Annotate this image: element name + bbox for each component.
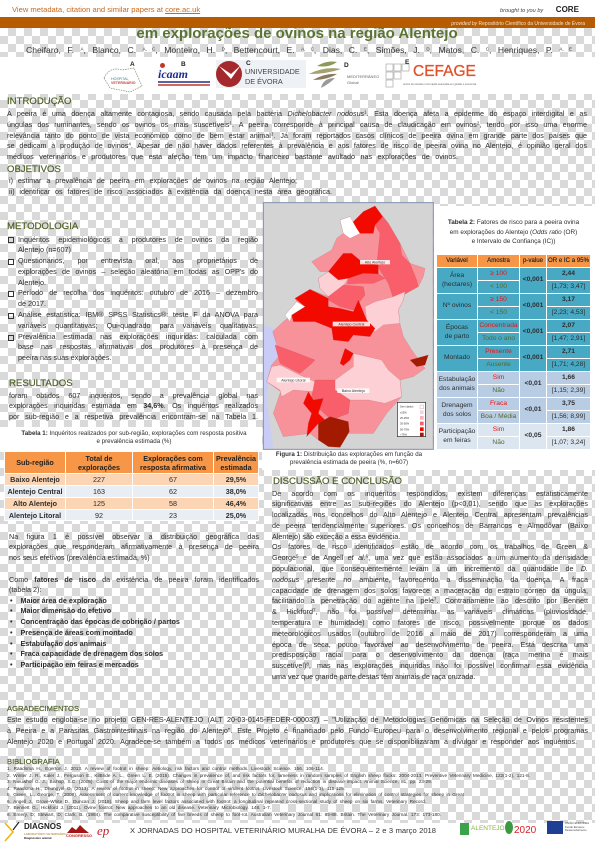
text: metodologia list: Período de recolha dos inquéritos: outubro de 2016 – dezembro [18,288,258,297]
logo B: icaam: icaam [158,67,188,81]
caption: tabela 2: Tabela 2: Fatores de risco para a peeira ovina [448,219,579,226]
footer logo: european union: Fundo Europeu [565,825,584,829]
text: discussao e conclusao: uma vez que grande parte destas têm animais de raça cruzada. [272,672,475,681]
table 2: fatores de risco: <0,05 [525,432,541,439]
text: metodologia list: Análise estatística: IBM® SPSS Statistics®: teste F da ANOVA para [18,310,258,319]
caption: tabela 2: em explorações do Alentejo (Odds ratio (OR) [450,229,577,236]
table 2: fatores de risco: Ausente [486,361,511,368]
text: resultados: explorações inquiridas estimada em 34,6%. Os inquéritos realizados [9,401,258,410]
table 2: fatores de risco: 3,17 [562,296,575,303]
table 2: fatores de risco: [1,73; 3,47] [552,283,585,290]
list: fatores de risco: • Concentração das épocas de cobrição / partos [10,617,180,626]
footer logo: portugal 2020 [505,821,536,836]
logo D: mediterranean institute [309,62,380,88]
map: distribuicao geografica: >75% [400,433,408,437]
text: discussao e conclusao: de peeira tendencialmente superiores. Os concelhos de Barrancos e Almodôvar (Baixo [272,521,588,530]
text: bibliografia: 2. Winter J. R., Kaler J., Ferguson E., KilBride A. L., Green L. E. (2015). Changes in prevalence of, and risk factors for, lameness in random samples of English sheep flocks: 2004-2013. Preventive Veterinary Medicine, 122(1-2), 121-8. [7,772,530,778]
text: figura 1 paragraph: nos seus efetivos (prevalência estimada, %) [9,553,150,562]
logo E: cefage: centro de estudos e formação avançada em gestão e economia [403,83,476,86]
text: objetivos: ii) identificar os fatores de risco associados à existência da doença nesta área geográfica. [9,187,332,196]
footer logo: diagnos: LABORATÓRIO VETERINÁRIO [24,832,67,836]
map: distribuicao geografica: Sem dados [400,405,414,409]
heading: bibliografia: BIBLIOGRAFIA [7,757,60,766]
text: discussao e conclusao: significativas entre as sub-regiões do Alentejo (p<0,01), sendo que as explorações [272,499,588,508]
logo B: icaam [158,61,210,86]
table 2: fatores de risco: ≥ 150 [490,296,507,303]
text: bibliografia: 3. Nieuwhof G. J., Bishop, S.C. (2005). Costs of the major endemic diseases of sheep in Great Britain and the potential benefits of reduction in disease impact. Animal Science, 81, pp. 23-29. [7,779,432,784]
list: fatores de risco [10,596,180,669]
table 2: fatores de risco: [1,47; 2,91] [552,335,585,342]
table 2: fatores de risco: Fraca [490,400,507,407]
table 1: 92 [95,510,103,520]
text: introducao: se dedicam à produção de ovinos4. Apesar de não haver dados referentes à prevalência e aos fatores de risco de peeira ovina no Alentejo, é opinião geral dos [7,141,587,150]
footer title: X JORNADAS DO HOSPITAL VETERINÁRIO MURALHA DE ÉVORA – 2 e 3 março 2018 [130,826,436,835]
text: metodologia list: Alentejo. [18,278,46,287]
footer logo: script mark: ep [97,823,109,838]
map: distribuicao geografica [262,202,434,450]
text: figura 1 paragraph [9,532,259,594]
logo C: universidade de evora: C [246,60,251,67]
table 2: fatores de risco: [1,56; 8,99] [552,413,585,420]
text: discussao e conclusao: facilitando a penetração do agente na pele7. Contrariamente ao descrito por Bennett [272,596,588,605]
text: bibliografia [7,766,530,817]
table 1: resposta afirmativa [140,462,206,472]
white figure caption backing [262,449,435,470]
logo E: cefage: CEFAGE [413,63,476,80]
text: discussao e conclusao: suscetível)8, mas nas explorações inquiridas não foi possível confirmar essa evidência [272,661,588,670]
heading: resultados: RESULTADOS [9,378,73,389]
table 2: fatores de risco: < 100 [490,283,507,290]
table 1: 23 [169,510,177,520]
text: metodologia list: Questionários, por entrevista oral, aos proprietários de [18,256,258,265]
table 2: fatores de risco: [1,15; 2,39] [552,387,585,394]
text: figura 1 paragraph: Na figura 1 é possível observar a distribuição geográfica das [9,532,259,540]
footer logo: european union: UNIÃO EUROPEIA [565,821,589,825]
table 2: fatores de risco: em feiras [443,436,471,444]
text: discussao e conclusao: George5 e de Angell et al.6, uma vez que estão associados a um aumento da densidade [272,553,588,562]
table 2: fatores de risco: <0,01 [525,380,541,387]
table 1: 46,4% [226,499,246,508]
table 2: fatores de risco: Todo o ano [482,335,515,342]
list: fatores de risco: • Maior área de exploração [10,596,107,604]
logo B: icaam: B [181,61,186,68]
table 1: Baixo Alentejo [10,475,60,484]
table 2: fatores de risco: [1,71; 4,28] [552,361,585,368]
list: fatores de risco: • Participação em feiras e mercados [10,660,139,669]
map: distribuicao geografica: 35-50% [400,422,410,426]
orange repository bar [0,17,595,28]
table 2: fatores de risco: Estabulação [439,376,475,383]
text: discussao e conclusao: época de seca, pouco favorável ao desenvolvimento de peeira. Está descrita uma [272,640,588,649]
table 2: fatores de risco: Sim [493,374,504,381]
map: distribuicao geografica: Alentejo Litoral [281,378,306,382]
caption: tabela 1 [21,430,247,445]
text: discussao e conclusao: De acordo com os inquéritos respondidos, existem diferenças estatisticamente [272,488,588,498]
logo C: universidade de evora [216,60,306,88]
orange repository bar: provided by Repositório Científico da Universidade de Évora [451,21,585,27]
text: agradecimentos: à Peeira e a Parasitas Gastrointestinais na região do Alentejo". Este Projeto é financiado pelo Fundo Europeu para o desenvolvimento regional e pelos programas [7,726,588,735]
footer logo: red mark: CONGRESSO [66,833,92,838]
white table 1 backing [0,427,262,451]
table 1: 227 [93,475,105,484]
footer logo: diagnos: DIAGNOS [24,822,61,831]
core brand: brought to you by CORE [500,5,579,14]
text: metodologia list: peeira nas suas explorações. [18,353,112,362]
text: introducao [7,109,587,161]
table 2: fatores de risco: p-value [523,257,543,264]
footer logo: european union: Desenvolvimento [565,828,586,832]
map: distribuicao geografica: 25-35% [400,416,410,420]
table 1: Total de [85,454,113,462]
heading: objetivos: OBJETIVOS [7,164,61,175]
text: discussao e conclusao: Os fatores de risco identificados estão de acordo com os trabalhos de Green & [272,542,588,551]
text: metodologia list: Inquéritos epidemiológicos a produtores de ovinos da região [18,234,258,244]
table 1: Prevalência [216,454,256,462]
white logo band [0,57,595,94]
text: agradecimentos: Este estudo engloba-se no projeto GEN-RES-ALENTEJO (ALT 20-03-0145-FEDER-000037) – "Utilização de Metodologias Genómicas na Seleção de Ovinos resistentes [7,715,588,724]
logo C: universidade de evora: DE ÉVORA [245,77,283,86]
caption: figura 1: Figura 1: Distribuição das explorações em função da [276,451,422,458]
white table 2 backing [434,206,595,470]
table 1: Alto Alentejo [13,499,57,508]
table 1 [4,451,259,521]
text: agradecimentos: Alentejo 2020 e Portugal 2020. Agradece-se também a todos os médicos veterinários e produtores que se disponibilizaram a divulgar e responder aos inquéritos. [7,737,577,746]
caption: figura 1: prevalência estimada de peeira (%, n=607) [290,459,408,466]
text: resultados: foram obtidos 607 inquéritos, sendo a prevalência global nas [9,390,258,400]
table 2: fatores de risco: <0,001 [523,328,543,335]
table 1: 125 [93,499,105,508]
table 2: fatores de risco: (hectares) [442,280,472,288]
map: distribuicao geografica: ≤25% [400,410,407,414]
table 2: fatores de risco: de parto [445,332,469,340]
text: objetivos: i) estimar a prevalência de peeira em explorações de ovinos na região Alentejo; [9,176,297,185]
table 1: Alentejo Litoral [9,510,61,520]
text: bibliografia: 8. Emery, D; Stewart, D; Clark, B. (1984). The comparative susceptibility of five breeds of sheep to foot-rot. Australian Veterinary Journal 61: 85-88. Britain. The Veterinary Journal. 173: 173-180. [7,812,441,816]
list: fatores de risco: • Maior dimensão do efetivo [10,606,111,615]
text: figura 1 paragraph: Como fatores de risco da existência de peeira foram identificados [9,575,259,584]
table 1: Sub-região [16,458,54,467]
text: bibliografia: 5. Green, L., George, T. (2008). Assessment of current knowledge of footrot in sheep with particular reference to Dichelobacter nodosus and implications for elimination of control strategies for sheep in Great [7,792,464,797]
footer logo: portugal 2020: 2020 [514,825,536,836]
table 2: fatores de risco: Área [450,272,464,279]
table 2: fatores de risco: Sim [493,426,504,433]
list: fatores de risco: • Presença de áreas com montado [10,628,133,637]
text: discussao e conclusao: populacional, que consequentemente levam a um incremento da quantidade de D. [272,564,588,573]
text: objetivos [9,176,332,196]
table 2: fatores de risco [437,255,590,449]
text: bibliografia: 7. Bennett G., Hickford J. (2011). Ovine footrot: New approaches to an old disease. Veterinary Microbiology. 148. 1-7. [7,805,271,810]
table 2: fatores de risco: Presente [485,348,512,355]
table 2: fatores de risco: <0,001 [523,302,543,309]
table 1: 38,0% [226,487,246,496]
table 2: fatores de risco: 3,75 [562,400,575,407]
text: metodologia list [8,234,258,362]
table 1: 62 [169,487,177,496]
table 2: fatores de risco: OR e IC a 95% [548,257,589,264]
table 1: 25,0% [226,510,246,520]
heading: metodologia: METODOLOGIA [7,221,78,232]
text: discussao e conclusao: nodosus presente no ambiente, favorecendo a disseminação da doença. A fraca [272,575,588,584]
text: bibliografia: 6. Angell J., Grove-White D., Duncan J. (2018). Sheep and farm level factors associated with footrot: a longitudinal repeated cross-sectional study of sheep on six farms. Veterinary Record. [7,798,426,804]
text: introducao: médicos veterinários e produtores que esta afeção tem um impacto financeiro bastante avultado nas explorações de ovinos. [7,152,458,161]
table 2: fatores de risco: Boa / Média [481,413,516,420]
heading: introducao: INTRODUÇÃO [7,96,72,107]
authors: Cheifaro, F. A, Blanco, C. A, C, Monteiro, H. D, Bettencourt, E. A, C, Dias, C. E, Simões, J. D, Matos, C. C, Henriques, P. A, E [26,45,572,55]
text: introducao: relevância tanto do ponto de vista económico como de bem estar animal3. Já foram reportados casos clínicos de peeira ovina em grande parte dos países que [7,131,587,140]
table 2: fatores de risco: Concentrada [479,322,518,329]
white footer band [0,823,595,842]
table 1: Explorações com [143,454,203,462]
logo A: hospital veterinario: VETERINÁRIO [111,81,136,85]
table 2: fatores de risco: dos animais [439,384,475,392]
text: agradecimentos [7,715,588,746]
text: discussao e conclusao: predisposição racial para o desenvolvimento da doença (raça merina é mais [272,650,588,659]
caption: tabela 2 [448,219,580,245]
logo A: hospital veterinario [104,61,142,92]
logo E: cefage [386,59,476,88]
heading: discussao e conclusao: DISCUSSÃO E CONCLUSÃO [273,476,402,487]
text: bibliografia: 1. Raadsma H., Egerton J. 2013. A review of footrot in sheep: Aetiology, risk factors and control methods. Livestock Science. 156. 106-114. [7,766,324,771]
text: figura 1 paragraph: explorações que responderam afirmativamente à presença de peeira [9,542,259,551]
table 1: 58 [169,499,177,508]
table 2: fatores de risco: Drenagem [441,402,473,409]
table 2: fatores de risco: Variável [446,257,468,264]
table 2: fatores de risco: Não [492,439,505,446]
text: resultados [9,390,258,421]
table 2: fatores de risco: [2,23; 4,53] [552,309,585,316]
heading: agradecimentos: AGRADECIMENTOS [7,704,79,713]
core header link: View metadata, citation and similar papers at core.ac.uk [12,5,200,14]
footer logo: diagnos: Diagnóstico animal [24,836,52,840]
table 2: fatores de risco: 2,71 [562,348,575,355]
map: distribuicao geografica: Alto Alentejo [365,260,385,264]
logo D: mediterranean institute: MEDITERRÂNEO [347,74,379,79]
table 2: fatores de risco: 2,07 [562,322,575,329]
logo A: hospital veterinario: A [130,61,135,68]
table 2: fatores de risco: Não [492,387,505,394]
text: discussao e conclusao: meteorológicos usados (outubro de 2016 a maio de 2017) corresponderam a uma [272,629,588,638]
table 2: fatores de risco: dos solos [443,410,471,418]
table 2: fatores de risco: < 150 [490,309,507,316]
text: discussao e conclusao: localizadas nos concelhos do Alto Alentejo e Alentejo Central apresentam prevalências [272,510,588,519]
map: distribuicao geografica: Baixo Alentejo [342,389,365,393]
caption: figura 1 [276,451,422,466]
text: bibliografia: 4. Raadsma H., Dhungyel O. (2013). A review of footrot in sheep: New approaches for control of virulent footrot. Livestock Science, 156(1-3), 115-125. [7,786,345,790]
text: metodologia list: explorações de ovinos – seleção aleatória em todas as OPP's do [18,267,258,276]
text: metodologia list: de 2017. [18,299,46,308]
text: figura 1 paragraph: (tabela 2): [9,585,41,594]
list: fatores de risco: • Estabulação dos animais [10,639,106,648]
list: fatores de risco: • Fraca capacidade de drenagem dos solos [10,649,163,658]
table 2: fatores de risco: 1,86 [562,426,575,433]
table 2: fatores de risco: Épocas [446,324,468,331]
table 2: fatores de risco: 1,66 [562,374,575,381]
footer logo: red mark [66,825,92,838]
logo A: hospital veterinario: HOSPITAL [111,77,129,81]
table 1: 163 [93,487,105,496]
table 2: fatores de risco: <0,001 [523,276,543,283]
text: metodologia list: variáveis quantitativas; Qui-quadrado para variáveis qualitativas. [18,321,258,330]
table 1: 29,5% [226,475,246,484]
text: discussao e conclusao: & Hickford7, não foi possível determinar as variáveis climáticas (pluviosidade, [272,607,588,616]
caption: tabela 1: Tabela 1: Inquéritos realizados por sub-região, explorações com resposta positiva [21,430,247,436]
text: discussao e conclusao [272,488,588,681]
table 2: fatores de risco: Nº ovinos [443,302,471,309]
caption: tabela 2: e Intervalo de Confiança (IC)) [472,238,555,245]
table 2: fatores de risco: Amostra [487,257,510,264]
text: metodologia list: Prevalência estimada nas explorações inquiridas: calculada com [18,332,258,341]
title: em explorações de ovinos na região Alentejo [136,25,458,42]
logo C: universidade de evora: UNIVERSIDADE [245,67,300,76]
map: distribuicao geografica: 50-75% [400,427,410,431]
text: metodologia list: base nas respostas afirmativas dos produtores à presença de [18,342,258,351]
footer logo: alentejo 2020: ALENTEJO [471,825,505,832]
caption: tabela 1: e prevalência estimada (%) [96,438,171,445]
text: resultados: por sub-região e a respetiva prevalência encontram-se na Tabela 1. [9,412,258,421]
logo E: cefage: E [405,59,409,66]
table 2: fatores de risco: [1,07; 3,24] [552,439,585,446]
table 2: fatores de risco: <0,01 [525,406,541,413]
table 2: fatores de risco: Montado [444,354,470,361]
map: distribuicao geografica: Alentejo Central [338,322,365,326]
logo D: mediterranean institute: Global [347,80,359,85]
table 1: Alentejo Central [7,487,63,496]
footer logo: alentejo 2020 [460,823,505,835]
table 2: fatores de risco: Participação [439,428,475,435]
text: discussao e conclusao: capacidade de drenagem dos solos favorece a maceração do estrato córneo da úngula, [272,586,588,595]
table 2: fatores de risco: <0,001 [523,354,543,361]
text: discussao e conclusao: Alentejo) são exceção a essa evidência. [272,532,400,541]
table 1: 67 [169,475,177,484]
footer logo: diagnos [4,822,67,842]
table 2: fatores de risco: 2,44 [562,270,575,277]
footer logo: european union [547,821,590,834]
text: discussao e conclusao: temperatura e humidade) como fatores de risco, possivelmente porque os dados [272,618,588,627]
text: introducao: úngulas dos ruminantes, sendo os ovinos os mais suscetíveis1. A peeira corresponde à principal causa de claudicação em ovinos2, tendo por isso uma enorme [7,120,587,129]
logo D: mediterranean institute: D [344,62,349,69]
text: metodologia list: Alentejo (n=607) [18,245,71,254]
table 1: explorações [78,462,120,472]
table 1: estimada [220,462,252,472]
table 2: fatores de risco: ≥ 100 [490,270,507,277]
text: introducao: A peeira é uma doença altamente contagiosa, sendo causada pela bactéria Dichelobacter nodosus1. Esta doença afeta a epiderme do espaço interdigital e as [7,109,587,118]
